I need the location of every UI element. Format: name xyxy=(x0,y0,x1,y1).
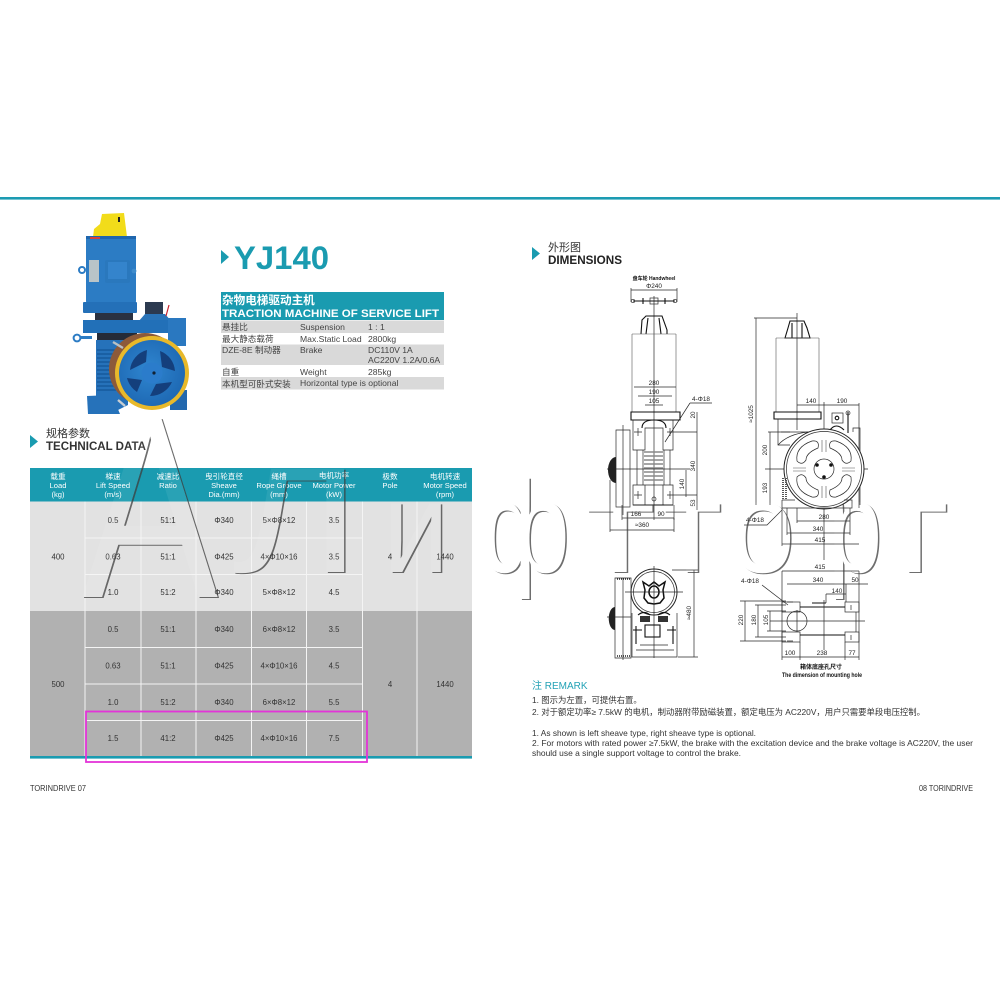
spec table header xyxy=(221,292,444,320)
table values xyxy=(51,516,454,743)
model title: YJ140 xyxy=(234,240,329,276)
table header: 电机功率 xyxy=(319,470,350,480)
drawing: mounting hole plan: 415 xyxy=(815,564,826,571)
spec table header: TRACTION MACHINE OF SERVICE LIFT xyxy=(222,308,439,320)
drawing: front view: 4-Φ18 xyxy=(692,396,710,403)
watermark: р xyxy=(828,454,882,600)
cross flange xyxy=(83,320,185,333)
spec rows: 最大静态载荷 xyxy=(222,333,274,344)
remark: 注 REMARK xyxy=(532,679,588,692)
table header: Dia.(mm) xyxy=(208,490,240,499)
drawing: front view: 105 xyxy=(649,398,660,405)
heading: dimensions: 外形图 xyxy=(548,241,581,254)
drawing: mounting hole plan: 105 xyxy=(763,614,770,625)
remark: should use a single support voltage to control the brake. xyxy=(532,748,741,758)
spec rows: Suspension xyxy=(300,322,345,332)
table values: 1440 xyxy=(436,552,454,562)
table values: 7.5 xyxy=(329,734,340,743)
drawing: front view: 90 xyxy=(657,511,665,518)
heading: technical data xyxy=(30,426,147,453)
table values: 51:1 xyxy=(160,625,176,634)
table values: 4 xyxy=(388,552,393,562)
drawing: mounting hole plan: 100 xyxy=(785,650,796,657)
spec rows: DZE-8E 制动器 xyxy=(222,344,281,355)
motor body xyxy=(86,236,136,303)
drawing: front view: 166 xyxy=(631,511,642,518)
table header: 电机转速 xyxy=(430,471,461,481)
drawing: mounting hole plan: The dimension of mounting hole xyxy=(782,673,863,679)
table header: Rope Groove xyxy=(256,481,302,490)
table values: Φ425 xyxy=(214,662,234,670)
drawing: mounting hole plan: 340 xyxy=(813,577,824,584)
drawing: front view: 190 xyxy=(649,389,660,396)
table values: 51:1 xyxy=(160,552,176,562)
drawing: side view: 415 xyxy=(815,537,826,544)
technical data table xyxy=(30,468,472,759)
footer right: 08 TORINDRIVE xyxy=(919,783,973,793)
table values: 5×Φ8×12 xyxy=(263,516,295,525)
spec table xyxy=(221,292,444,390)
table values: 1.5 xyxy=(108,734,119,743)
remark xyxy=(532,679,973,758)
spec rows: 悬挂比 xyxy=(222,321,248,332)
drawing: mounting hole plan: 140 xyxy=(832,588,843,595)
motor photo xyxy=(74,213,189,414)
table values: 400 xyxy=(51,552,65,562)
table values: 4×Φ10×16 xyxy=(260,662,298,670)
table values: Φ425 xyxy=(214,552,234,562)
drawing: front view: 140 xyxy=(679,478,686,489)
table values: 4×Φ10×16 xyxy=(260,552,298,562)
table values: 51:2 xyxy=(160,588,176,597)
drawing: side view: 140 xyxy=(806,398,817,405)
drawing: front view: 280 xyxy=(649,380,660,387)
spec rows: 285kg xyxy=(368,367,392,377)
drawing: mounting hole plan: 238 xyxy=(817,650,828,657)
table values: Φ425 xyxy=(214,734,234,743)
watermark: т xyxy=(662,454,722,600)
table values: 3.5 xyxy=(329,516,340,525)
drawing: side view xyxy=(744,313,868,560)
sheave xyxy=(109,333,181,405)
drawing: top view xyxy=(607,566,698,660)
table values: 0.63 xyxy=(105,662,121,670)
drawing: side view: 190 xyxy=(837,398,848,405)
table values: Φ340 xyxy=(214,625,234,634)
drawing: side view: 193 xyxy=(762,482,769,493)
spec rows: 1 : 1 xyxy=(368,322,385,332)
drawing: mounting hole plan: 4-Φ18 xyxy=(741,578,759,585)
table header: 梯速 xyxy=(105,471,121,481)
table values: 1.0 xyxy=(108,588,119,597)
drawing: front view: 53 xyxy=(690,499,697,507)
watermark xyxy=(82,363,950,653)
drawing: mounting hole plan xyxy=(738,564,868,679)
table values: 0.5 xyxy=(108,625,119,634)
highlight box xyxy=(86,712,367,762)
table values: 4.5 xyxy=(329,588,340,597)
table values: 500 xyxy=(51,680,65,689)
drawing: side view: 4-Φ18 xyxy=(746,517,764,524)
group 500 kg background xyxy=(30,611,472,756)
spec rows xyxy=(222,321,440,389)
drawing: front view: ≈360 xyxy=(635,522,650,529)
table values: 3.5 xyxy=(329,625,340,634)
drawing: side view: ≈1025 xyxy=(748,405,755,423)
table header: Motor Power xyxy=(312,481,356,490)
table values: Φ340 xyxy=(214,698,234,707)
remark: 1. 图示为左置，可提供右置。 xyxy=(532,695,642,705)
watermark: ф xyxy=(480,454,570,600)
watermark: Л xyxy=(232,436,360,604)
drawing: mounting hole plan: 220 xyxy=(738,614,745,625)
table values: 51:1 xyxy=(160,516,176,525)
watermark: о xyxy=(730,454,795,600)
watermark: А xyxy=(82,363,219,653)
table header: Motor Speed xyxy=(423,481,467,490)
drawing: front view xyxy=(607,275,712,532)
drawing: mounting hole plan: 箱体底座孔尺寸 xyxy=(800,663,842,671)
table values: 5×Φ8×12 xyxy=(263,588,295,597)
watermark: г xyxy=(898,454,950,600)
top rule xyxy=(0,197,1000,200)
table values: 1440 xyxy=(436,680,454,689)
table header: (rpm) xyxy=(436,490,455,499)
table header: Ratio xyxy=(159,481,177,490)
table values: 5.5 xyxy=(329,698,340,707)
remark: 1. As shown is left sheave type, right sheave type is optional. xyxy=(532,728,756,738)
table values: 1.0 xyxy=(108,698,119,707)
remark: 2. For motors with rated power ≥7.5kW, the brake with the excitation device and the brake voltage is AC220V, the user xyxy=(532,738,973,748)
table header: 减速比 xyxy=(157,471,180,481)
drawing: side view: 200 xyxy=(762,444,769,455)
drawing: front view: 盘车轮 Handwheel xyxy=(633,275,676,282)
table header: (kg) xyxy=(51,490,65,499)
table values: Φ340 xyxy=(214,588,234,597)
gearbox with ribs xyxy=(96,340,128,410)
spec rows: Max.Static Load xyxy=(300,334,362,344)
table values: 4.5 xyxy=(329,662,340,670)
table values: 4 xyxy=(388,680,393,689)
drawing: mounting hole plan: 77 xyxy=(848,650,856,657)
heading: dimensions xyxy=(532,241,622,267)
drawing: top view: ≈480 xyxy=(686,605,693,620)
watermark: т xyxy=(585,454,655,600)
table header: Sheave xyxy=(211,481,237,490)
table values: 6×Φ8×12 xyxy=(263,698,295,707)
spec rows: 自重 xyxy=(222,366,240,377)
drawing: side view: 280 xyxy=(819,514,830,521)
table values: 0.5 xyxy=(108,516,119,525)
heading: dimensions: DIMENSIONS xyxy=(548,255,622,267)
spec rows: Weight xyxy=(300,367,327,377)
table header: 载重 xyxy=(50,471,66,481)
spec rows: AC220V 1.2A/0.6A xyxy=(368,355,440,365)
heading: technical data: TECHNICAL DATA xyxy=(46,440,147,453)
drawing: mounting hole plan: 50 xyxy=(851,577,859,584)
table header xyxy=(30,468,472,502)
table header: 绳槽 xyxy=(271,471,287,481)
drawing: front view: 20 xyxy=(690,411,697,419)
table header: (mm) xyxy=(270,490,288,499)
watermark: и xyxy=(383,454,449,600)
table values: Φ340 xyxy=(214,516,234,525)
table header: (kW) xyxy=(326,490,342,499)
spec rows: Brake xyxy=(300,345,323,355)
drawing: mounting hole plan: 180 xyxy=(751,614,758,625)
table values: 41:2 xyxy=(160,734,176,743)
heading: technical data: 规格参数 xyxy=(46,426,90,440)
drawing: front view: Φ240 xyxy=(646,283,662,290)
spec rows: 2800kg xyxy=(368,334,396,344)
table values: 4×Φ10×16 xyxy=(260,734,298,743)
drawing: front view: 340 xyxy=(690,460,697,471)
table values: 6×Φ8×12 xyxy=(263,625,295,634)
table header: (m/s) xyxy=(104,490,122,499)
spec table header: 杂物电梯驱动主机 xyxy=(222,293,315,307)
spec rows: 本机型可卧式安装 xyxy=(222,378,291,389)
icon: arrow xyxy=(221,250,229,264)
table header: Load xyxy=(50,481,66,490)
table values: 51:1 xyxy=(160,662,176,670)
spec rows: DC110V 1A xyxy=(368,345,413,355)
table values: 0.63 xyxy=(105,552,121,562)
remark: 2. 对于额定功率≥ 7.5kW 的电机，制动器附带励磁装置，额定电压为 AC220V，用户只需要单段电压控制。 xyxy=(532,707,925,717)
drawing: side view: 340 xyxy=(813,526,824,533)
table header: Lift Speed xyxy=(96,481,130,490)
terminal box and lever xyxy=(145,302,163,315)
table header: 曳引轮直径 xyxy=(205,471,243,481)
table header: 极数 xyxy=(382,471,398,481)
yellow brake cover xyxy=(93,213,127,237)
spec rows: Horizontal type is optional xyxy=(300,378,398,388)
footer left: TORINDRIVE 07 xyxy=(30,783,86,793)
table values: 3.5 xyxy=(329,552,340,562)
table values: 51:2 xyxy=(160,698,176,707)
group 400 kg background xyxy=(30,502,472,611)
table header: Pole xyxy=(382,481,398,490)
